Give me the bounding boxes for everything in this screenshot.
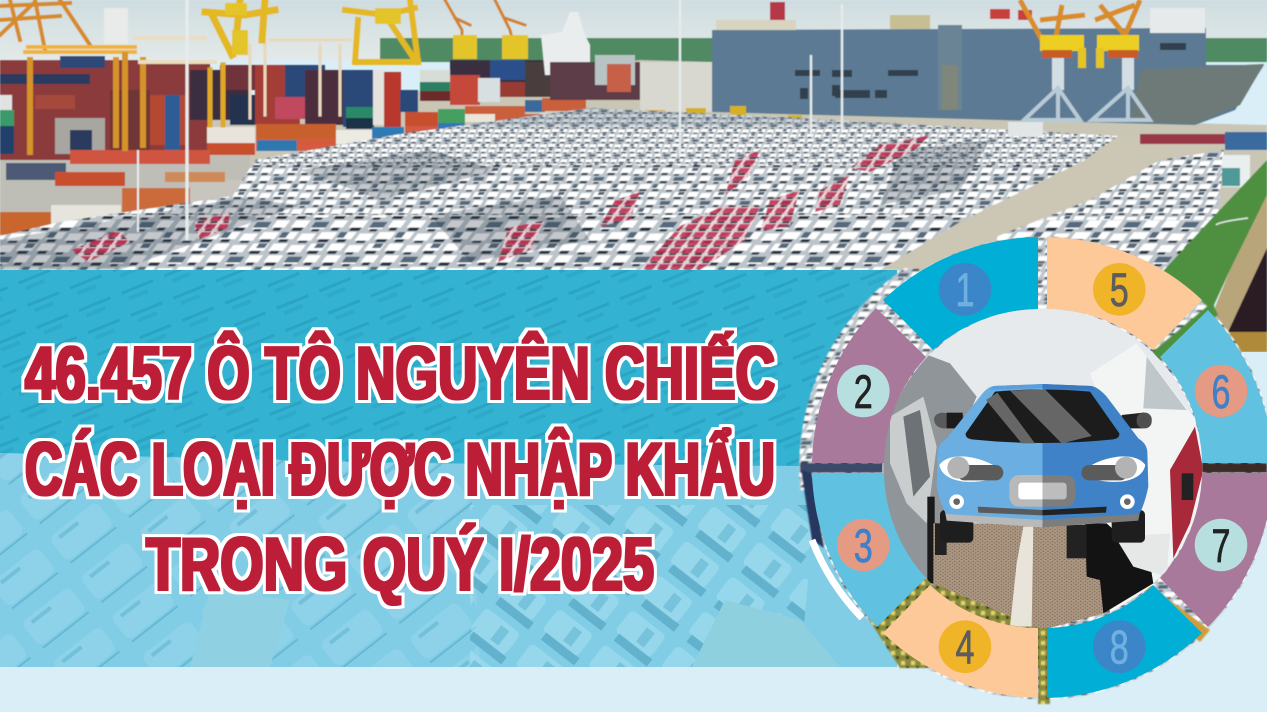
center photo with cars: [880, 307, 1207, 630]
right headlight: [1081, 456, 1145, 482]
circular photo rim behind ring: [799, 237, 1267, 704]
small crane cabs: [225, 3, 528, 59]
title line 3: TRONG QUÝ I/2025: [146, 522, 654, 606]
icon: blue car front view: [934, 384, 1152, 543]
mirrors: [934, 413, 963, 428]
badge 2: [837, 365, 890, 418]
windshield reflections: [986, 389, 1092, 443]
segment 5: [1047, 237, 1202, 350]
container stacks: [0, 56, 550, 160]
lower air intake: [978, 507, 1107, 515]
badge 5: [1093, 263, 1146, 316]
badge 8: 8: [1110, 620, 1129, 674]
parked red cars and tents: [1008, 122, 1267, 187]
ground tile in photo: [933, 523, 1103, 630]
container ship at back: [541, 12, 640, 100]
green slope and right embankment: [1200, 195, 1267, 345]
orange blocks at left: [0, 150, 250, 235]
gantry cranes: [0, 0, 525, 152]
segment 4: [883, 585, 1038, 698]
windshield: [966, 389, 1119, 443]
car carrier ship: [712, 2, 1264, 125]
quay ground: [0, 60, 1267, 270]
left headlight: [939, 456, 1003, 482]
segment 1: [883, 237, 1038, 350]
quay machinery: [645, 106, 802, 123]
number badges: [837, 263, 1247, 674]
badge 3: 3: [854, 519, 873, 572]
badge 6: [1195, 365, 1247, 418]
grille: [1009, 475, 1075, 507]
sky: [0, 0, 1267, 60]
white gantry cab: [104, 8, 128, 44]
main car lot: [0, 108, 1118, 270]
badge 6: 6: [1212, 365, 1230, 418]
badge 7: 7: [1212, 519, 1230, 572]
title: [25, 331, 775, 606]
body: [937, 384, 1148, 520]
tree line: [380, 38, 1267, 62]
badge 4: 4: [956, 620, 974, 674]
left row of cars: [883, 353, 977, 587]
red cars: [72, 135, 930, 270]
segment 2: [812, 308, 926, 463]
segment 6: [1160, 310, 1267, 463]
title line 1: 46.457 Ô TÔ NGUYÊN CHIẾC: [25, 331, 775, 415]
segment 8: [1047, 585, 1202, 698]
bumper lower: [945, 512, 1140, 527]
badge 5: 5: [1110, 263, 1129, 316]
tyres: [940, 510, 1145, 543]
badge 7: [1195, 519, 1247, 572]
sky in photo: [880, 307, 1207, 533]
left pier ground: [640, 62, 714, 112]
segment 3: [812, 473, 926, 627]
roof highlight: [990, 384, 1095, 390]
road between car lots: [880, 136, 1240, 270]
ring of numbered segments: [812, 237, 1267, 698]
left ground apron: [0, 155, 250, 240]
badge 1: [939, 263, 991, 316]
lamp posts: [138, 0, 1248, 240]
darker car clusters: [0, 140, 990, 270]
title line 2: CÁC LOẠI ĐƯỢC NHẬP KHẨU: [25, 427, 775, 511]
right white car: [1090, 343, 1203, 613]
front container row: [207, 98, 588, 155]
segment 7: [1160, 473, 1267, 627]
badge 4: [939, 620, 991, 674]
port cranes at quay: [1020, 0, 1150, 120]
right car tyres: [1085, 523, 1153, 613]
white lane stripe: [1010, 527, 1033, 627]
fog lights: [949, 494, 1135, 509]
badge 2: 2: [854, 365, 873, 418]
badge 8: [1093, 620, 1146, 674]
badge 3: [837, 519, 890, 572]
panel: title background with tinted car photo: [0, 270, 897, 667]
photo: port with imported cars: [0, 0, 1267, 352]
badge 1: 1: [956, 263, 974, 316]
second car lot: [995, 150, 1224, 270]
